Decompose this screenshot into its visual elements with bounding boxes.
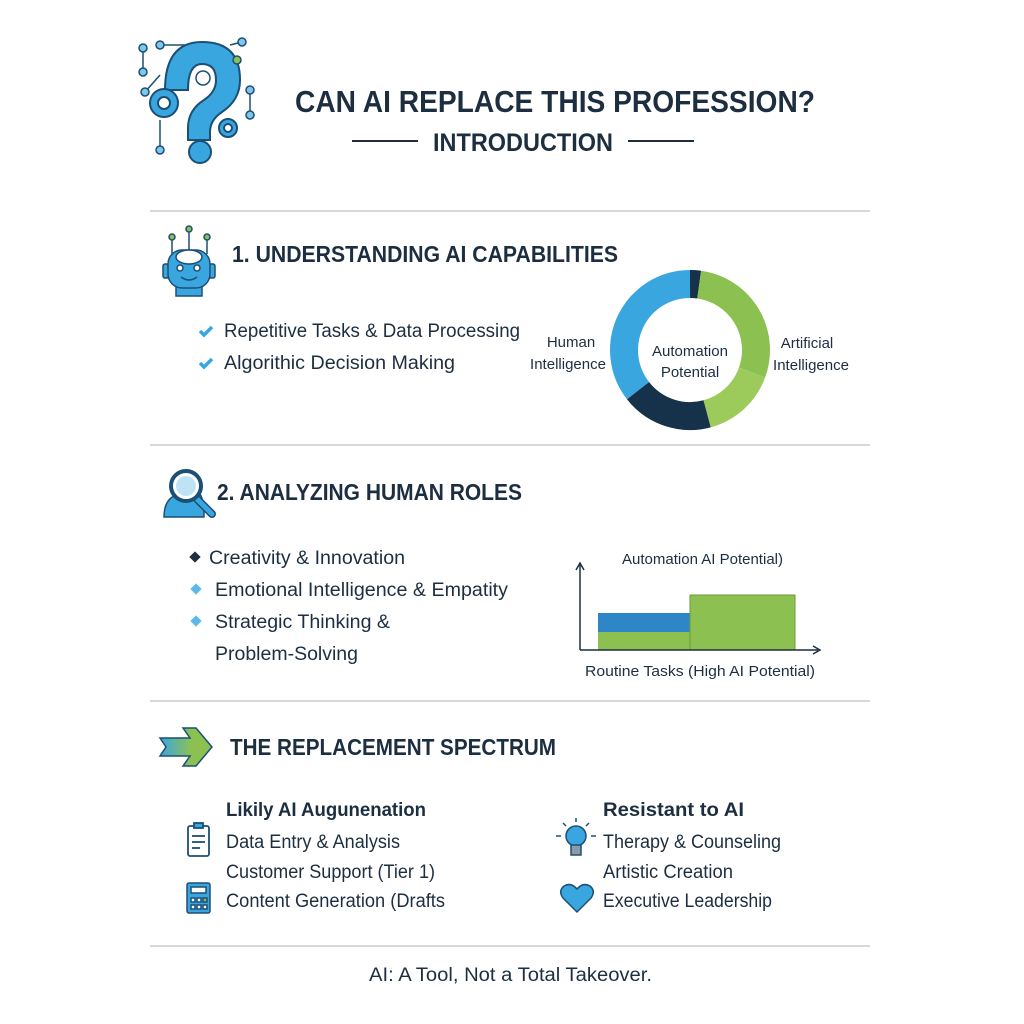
heading 2: 2. ANALYZING HUMAN ROLES xyxy=(217,479,522,505)
column: likely AI augmentation xyxy=(187,800,445,913)
donut chart xyxy=(530,284,849,416)
column: likely AI augmentation: Customer Support (Tier 1) xyxy=(226,862,435,883)
panel: the replacement spectrum xyxy=(160,728,781,913)
column: resistant to AI: Resistant to AI xyxy=(603,800,744,821)
subtitle: introduction: INTRODUCTION xyxy=(433,129,613,157)
donut chart: Intelligence xyxy=(773,357,849,374)
bar chart xyxy=(576,551,820,680)
bar chart: Routine Tasks (High AI Potential) xyxy=(585,663,815,680)
panel: analyzing human roles xyxy=(164,471,820,680)
column: resistant to AI: Executive Leadership xyxy=(603,891,772,912)
bullet list: Creativity & Innovation xyxy=(209,548,405,569)
icon: robot head xyxy=(163,226,215,296)
column: likely AI augmentation: Likily AI Augunenation xyxy=(226,800,426,821)
icon: calculator xyxy=(187,883,210,913)
donut chart: Human xyxy=(547,334,595,351)
donut chart: Potential xyxy=(661,364,719,381)
donut chart: Automation xyxy=(652,343,728,360)
bullet list xyxy=(200,321,520,374)
heading 3: THE REPLACEMENT SPECTRUM xyxy=(230,734,556,760)
icon: gradient arrow xyxy=(160,728,212,766)
column: likely AI augmentation: Data Entry & Analysis xyxy=(226,832,400,853)
column: likely AI augmentation: Content Generation (Drafts xyxy=(226,891,445,912)
footer tagline: AI: A Tool, Not a Total Takeover. xyxy=(369,965,652,986)
bullet list: Repetitive Tasks & Data Processing xyxy=(224,321,520,342)
column: resistant to AI xyxy=(556,800,781,912)
bullet list: Strategic Thinking & xyxy=(215,612,390,633)
icon: heart xyxy=(561,885,593,912)
bullet list: Emotional Intelligence & Empatity xyxy=(215,580,509,601)
bullet list: Algorithic Decision Making xyxy=(224,353,455,374)
icon: clipboard xyxy=(188,823,209,856)
column: resistant to AI: Artistic Creation xyxy=(603,862,733,883)
bullet list xyxy=(189,548,509,665)
title: CAN AI REPLACE THIS PROFESSION? xyxy=(295,84,815,119)
icon: person with magnifier xyxy=(164,471,212,517)
heading 1: 1. UNDERSTANDING AI CAPABILITIES xyxy=(232,241,618,267)
icon: lightbulb xyxy=(556,818,596,855)
panel: understanding AI capabilities xyxy=(163,226,849,416)
icon: question mark with gears xyxy=(139,38,254,163)
donut chart: Artificial xyxy=(781,335,833,352)
donut chart: Intelligence xyxy=(530,356,606,373)
column: resistant to AI: Therapy & Counseling xyxy=(603,832,781,853)
bar chart: Automation AI Potential) xyxy=(622,551,783,568)
bullet list: Problem-Solving xyxy=(215,644,358,665)
